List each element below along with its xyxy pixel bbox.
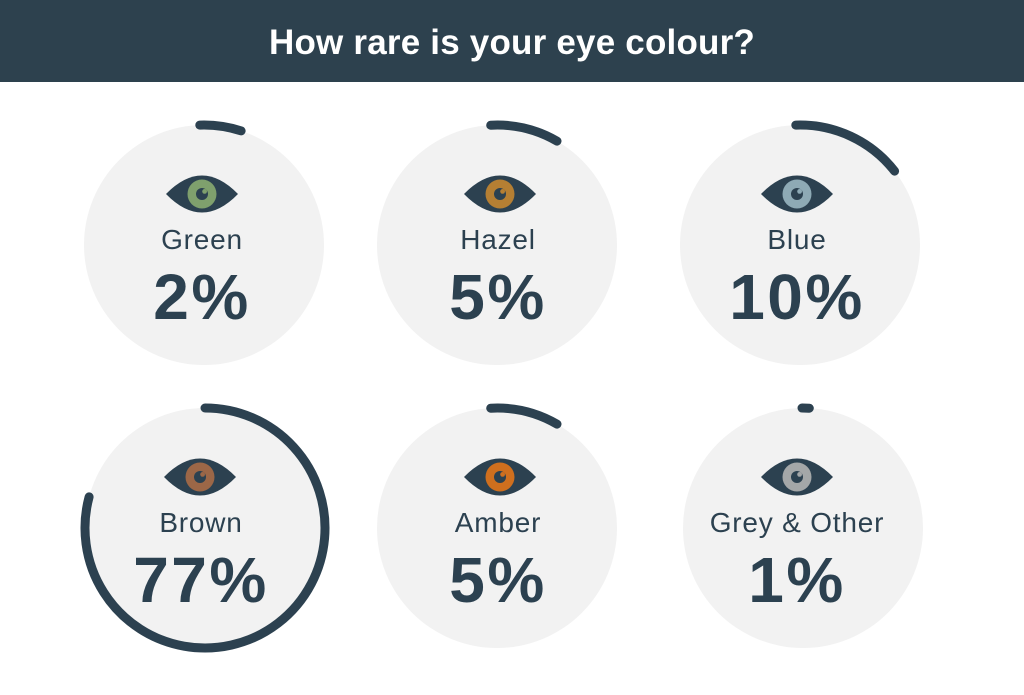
value: 77%: 77% bbox=[133, 544, 269, 616]
arc: amber 5% bbox=[491, 408, 557, 424]
label: Blue: Blue bbox=[767, 224, 827, 255]
icon: green eye bbox=[166, 176, 238, 212]
arc: blue 10% bbox=[796, 125, 895, 171]
label: Brown: Brown bbox=[159, 507, 243, 538]
icon: grey eye bbox=[761, 458, 833, 496]
icon: amber eye bbox=[464, 458, 536, 496]
value: 1%: 1% bbox=[748, 544, 846, 616]
arc: grey 1% bbox=[802, 403, 809, 413]
header bar bbox=[0, 0, 1024, 82]
arc: brown 77% bbox=[85, 408, 325, 648]
panel: hazel bbox=[377, 125, 617, 365]
label: Grey & Other: Grey & Other bbox=[710, 507, 884, 538]
arc: hazel 5% bbox=[491, 125, 557, 141]
value: 10%: 10% bbox=[729, 261, 865, 333]
label: Green: Green bbox=[161, 224, 243, 255]
value: 2%: 2% bbox=[153, 261, 251, 333]
label: Hazel: Hazel bbox=[460, 224, 536, 255]
panel: blue bbox=[680, 125, 920, 365]
title: How rare is your eye colour? bbox=[269, 23, 755, 62]
label: Amber: Amber bbox=[455, 507, 541, 538]
panel: green bbox=[84, 125, 324, 365]
panel: grey bbox=[683, 408, 923, 648]
value: 5%: 5% bbox=[449, 261, 547, 333]
panel: amber bbox=[377, 408, 617, 648]
icon: brown eye bbox=[164, 458, 236, 496]
arc: green 2% bbox=[200, 125, 241, 131]
panel: brown bbox=[85, 408, 325, 648]
icon: hazel eye bbox=[464, 176, 536, 212]
icon: blue eye bbox=[761, 176, 833, 212]
value: 5%: 5% bbox=[449, 544, 547, 616]
